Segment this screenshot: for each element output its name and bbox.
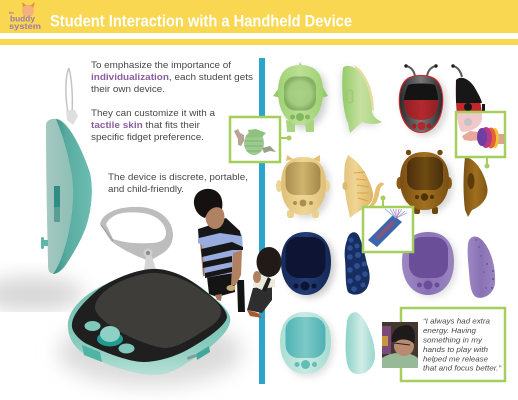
skin: teal front	[280, 312, 334, 377]
logo: buddy system	[9, 2, 41, 31]
quote text: that and focus better.”	[423, 364, 502, 372]
icon: hand with bracelet	[462, 127, 504, 148]
quote text: energy. Having	[423, 326, 477, 335]
device side view with key ring	[0, 68, 110, 352]
quote text: something in my	[423, 336, 483, 344]
skin: ladybug side	[451, 64, 485, 132]
photo: student portrait	[382, 322, 418, 368]
logo: buddy system: system	[9, 22, 41, 31]
skin: green dinosaur side	[341, 65, 382, 135]
main device front view	[58, 269, 242, 386]
quote text	[423, 316, 502, 372]
callout: bookmark fidget	[363, 196, 413, 252]
logo: buddy system: buddy	[10, 14, 36, 24]
text block: individualization: their own device.	[91, 84, 165, 95]
callout: monster fidget toy	[230, 117, 292, 162]
skin: ladybug front	[399, 64, 447, 136]
logo: buddy system: the	[9, 11, 14, 15]
quote text: helped me release	[423, 354, 488, 364]
header banner	[0, 0, 518, 45]
second child	[247, 247, 282, 318]
boy in striped shirt	[194, 189, 245, 312]
skin: navy bumpy side	[345, 232, 370, 295]
text block: tactile skin: tactile skin that fits their	[91, 120, 200, 131]
skin: yellow cat front	[276, 155, 330, 218]
icon: bookmark with tassel	[368, 209, 407, 247]
text block: tactile skin	[91, 108, 216, 143]
text block: tactile skin: They can customize it with a	[91, 108, 216, 119]
quote text: “I always had extra	[423, 316, 490, 326]
vertical blue divider	[259, 58, 265, 384]
text block: discrete device: and child-friendly.	[108, 184, 184, 195]
quote text: hands to play with	[423, 345, 488, 354]
device carabiner	[100, 207, 173, 270]
skin: purple front	[402, 232, 457, 297]
skin: teal side	[346, 312, 375, 374]
skin: brown bear front	[396, 150, 453, 214]
text block: discrete device: The device is discrete, portable,	[108, 172, 248, 183]
callout: fuzzy bracelet	[456, 112, 505, 168]
text block: individualization	[91, 60, 253, 95]
skin: yellow cat side	[342, 155, 384, 218]
quote box	[382, 308, 505, 381]
skin: green dinosaur front	[273, 62, 328, 132]
icon: green monster	[234, 129, 276, 155]
device buttons	[84, 321, 134, 354]
text block: individualization: To emphasize the importance of	[91, 60, 231, 71]
text block: discrete device	[108, 172, 248, 195]
title: Student Interaction with a Handheld Device	[50, 12, 352, 30]
skin: navy front	[281, 232, 335, 298]
text block: individualization: individualization , each student gets	[91, 72, 253, 83]
skin: brown bear side	[464, 157, 488, 217]
skin: purple side	[468, 237, 495, 298]
text block: tactile skin: specific fidget preference.	[91, 132, 204, 143]
